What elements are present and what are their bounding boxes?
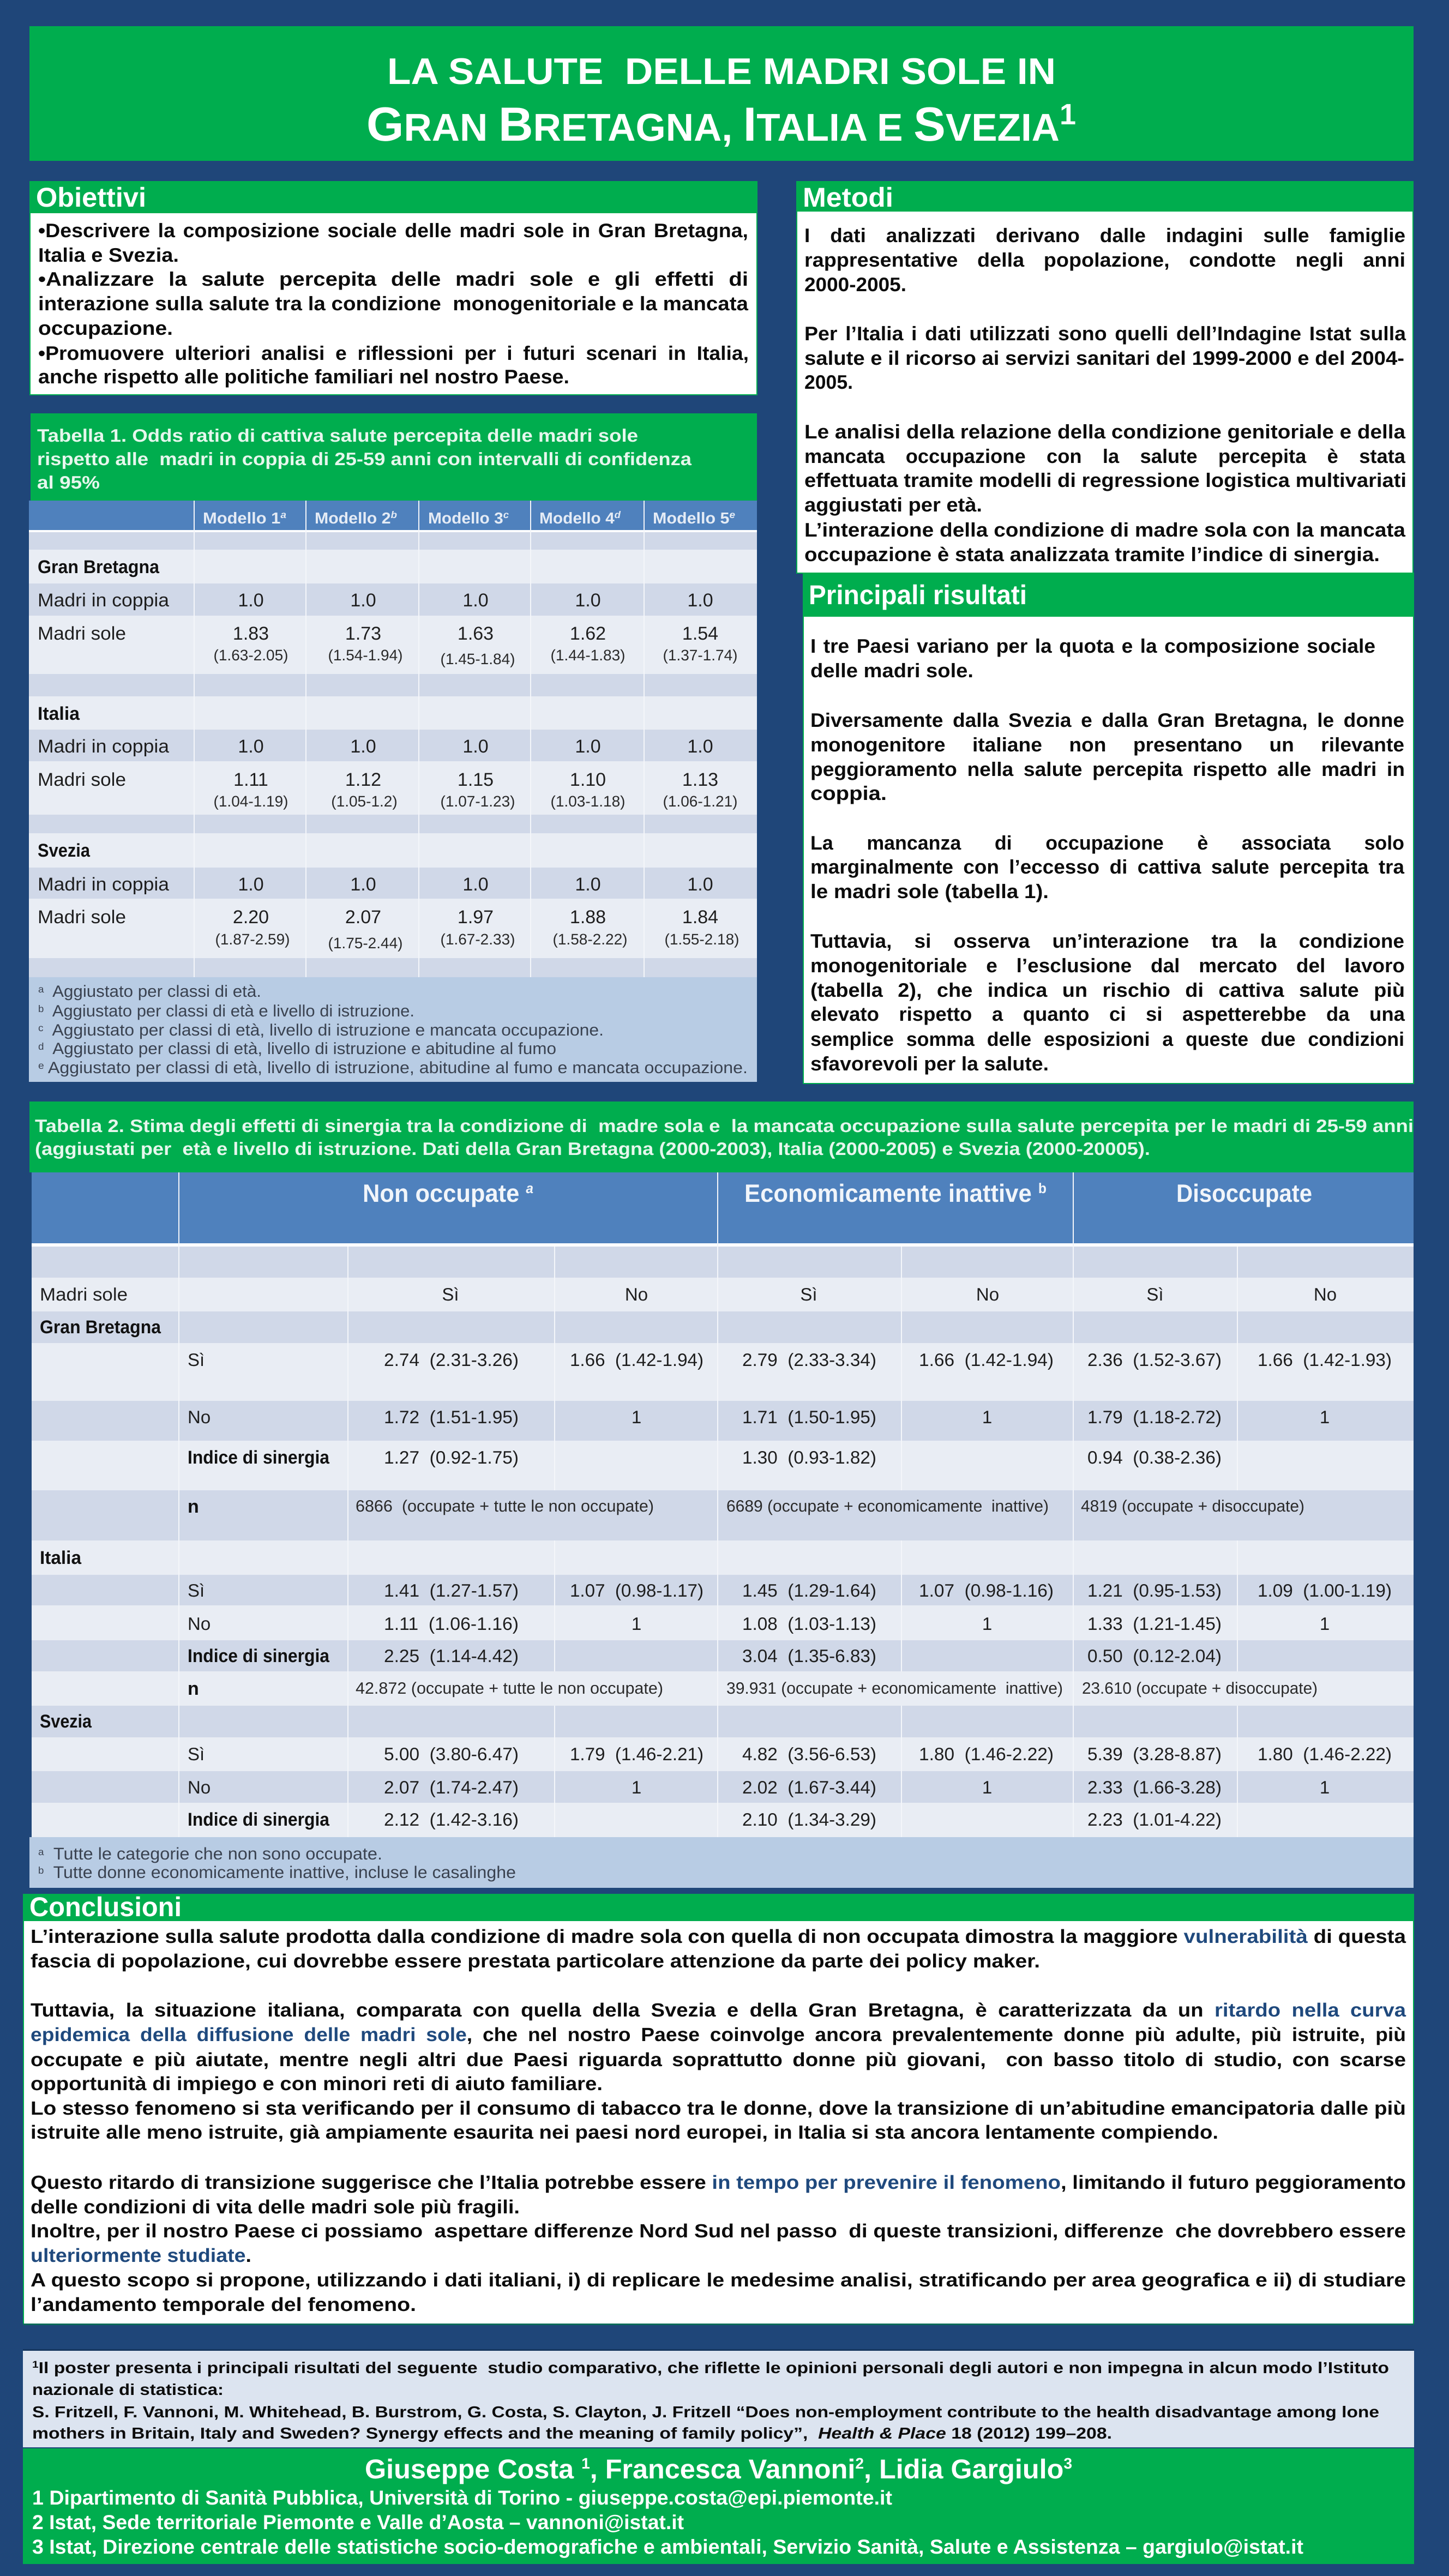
table 2 rows: Italia: Italia	[40, 1548, 82, 1568]
table 1 rows: Italia: 1.0	[350, 736, 376, 757]
table 2 rows: Italia: n	[188, 1678, 199, 1699]
heading: obiettivi: Obiettivi	[36, 182, 146, 213]
table 1 rows: Gran Bretagna: Madri sole	[38, 623, 126, 644]
table 1 rows: Gran Bretagna: (1.45-1.84)	[441, 651, 515, 667]
text: obiettivi: Italia e Svezia.	[38, 244, 179, 266]
text: metodi: occupazione è stata analizzata tramite l’indice di sinergia.	[804, 543, 1380, 565]
table 2 row: madri sole: No	[976, 1284, 999, 1304]
table 1 rows: Svezia: Svezia	[38, 840, 91, 861]
table 1 rows: Svezia: 1.0	[462, 874, 489, 895]
heading: conclusioni: Conclusioni	[29, 1892, 182, 1922]
text: obiettivi: anche rispetto alle politiche familiari nel nostro Paese.	[38, 365, 569, 388]
table 1 rows: Svezia	[38, 840, 739, 952]
table 1 rows: Gran Bretagna: 1.54	[682, 623, 718, 644]
table 1 rows: Italia: 1.10	[570, 769, 606, 790]
table 1 rows: Italia: Madri sole	[38, 769, 126, 790]
table 2 rows: Gran Bretagna: 1.66 (1.42-1.94)	[919, 1350, 1054, 1370]
table 1 rows: Svezia: (1.55-2.18)	[665, 931, 739, 948]
table 1 footnotes: Aggiustato per classi di età.	[44, 983, 261, 1001]
table 1 rows: Italia: (1.07-1.23)	[441, 793, 515, 810]
table 1 rows: Italia: 1.15	[458, 769, 494, 790]
table 2 rows: Italia: 1.07 (0.98-1.17)	[570, 1580, 704, 1600]
table 2 rows: Gran Bretagna: 1.27 (0.92-1.75)	[384, 1447, 519, 1467]
table 1 footnotes: e	[38, 1060, 44, 1071]
text: principali risultati: (tabella 2), che indica un rischio di cattiva salute più	[810, 979, 1405, 1001]
table 2 rows: Svezia: 5.00 (3.80-6.47)	[384, 1744, 519, 1764]
table 2 column headers	[363, 1179, 1312, 1207]
table 1 rows: Svezia: 1.0	[238, 874, 264, 895]
text: conclusioni: fascia di popolazione, cui dovrebbe essere prestata particolare attenzione da parte dei policy maker.	[31, 1951, 1040, 1972]
table 1 column headers: b	[391, 509, 397, 520]
reference note: 1	[32, 2359, 39, 2370]
text: obiettivi: •Promuovere ulteriori analisi e riflessioni per i futuri scenari in Italia,	[38, 342, 749, 364]
table 2 rows: Gran Bretagna: Sì	[188, 1350, 205, 1370]
table 2 rows: Italia	[40, 1548, 1392, 1699]
table 2 rows: Svezia: No	[188, 1777, 211, 1797]
table 1 rows: Italia: Madri in coppia	[38, 736, 169, 757]
table 1 column headers: a	[280, 509, 286, 520]
table 2 rows: Italia: 1.09 (1.00-1.19)	[1258, 1580, 1392, 1600]
table 1 rows: Svezia: Madri in coppia	[38, 874, 169, 895]
text: principali risultati: marginalmente con l’eccesso di cattiva salute percepita tra	[810, 856, 1405, 878]
text: conclusioni: Lo stesso fenomeno si sta verificando per il consumo di tabacco tra le donne, dove la transizione di un’abitudine emancipatoria dalle più	[31, 2098, 1406, 2119]
affiliations: 3 Istat, Direzione centrale delle statistiche socio-demografiche e ambientali, Servizio Sanità, Salute e Assistenza – gargiulo@istat.it	[32, 2536, 1303, 2558]
table 1 rows: Svezia: 1.0	[575, 874, 601, 895]
table 2 rows: Italia: 1.21 (0.95-1.53)	[1087, 1580, 1222, 1600]
title line 2: GRAN BRETAGNA, ITALIA E SVEZIA	[366, 97, 1060, 151]
table 1 footnotes	[29, 977, 757, 1082]
text: principali risultati: le madri sole (tabella 1).	[810, 880, 1049, 902]
text: metodi: effettuata tramite modelli di regressione logistica multivariati	[804, 469, 1406, 491]
text: metodi: 2000-2005.	[804, 273, 906, 296]
table 1 rows: Svezia: 1.0	[350, 874, 376, 895]
table 1 rows: Italia: 1.0	[238, 736, 264, 757]
text: conclusioni: istruite alle meno istruite, già ampiamente esaurita nei paesi nord europei, in Italia si sta ancora lentamente compiendo.	[31, 2122, 1218, 2143]
heading: tabella 2: Tabella 2. Stima degli effetti di sinergia tra la condizione di madre sola e la mancata occupazione sulla salute percepita per le madri di 25-59 anni	[35, 1116, 1414, 1136]
table 2 rows: Gran Bretagna: 1.79 (1.18-2.72)	[1087, 1407, 1222, 1427]
table 2 rows: Gran Bretagna: 1	[632, 1407, 641, 1427]
table 2 rows: Svezia: 2.23 (1.01-4.22)	[1087, 1809, 1222, 1829]
authors: , Francesca Vannoni	[590, 2454, 855, 2484]
table 2 footnotes: a	[38, 1846, 45, 1857]
table 1 rows: Italia: 1.0	[462, 736, 489, 757]
panel: obiettivi	[29, 181, 757, 395]
table 2 rows: Gran Bretagna: Indice di sinergia	[188, 1447, 330, 1468]
text: conclusioni: A questo scopo si propone, utilizzando i dati italiani, i) di replicare le medesime analisi, stratificando per area geografica e ii) di studiare	[31, 2270, 1406, 2291]
table 2 rows: Italia: No	[188, 1614, 211, 1634]
table 2 rows: Gran Bretagna: 1.71 (1.50-1.95)	[742, 1407, 876, 1427]
table 1 footnotes: c	[38, 1022, 44, 1033]
table 1 rows: Svezia: 1.97	[458, 907, 494, 928]
table 1 column headers: c	[503, 509, 509, 520]
table 1 rows: Italia	[38, 703, 737, 810]
heading: tabella 1	[31, 413, 757, 501]
table 2 column headers: Non occupate	[363, 1179, 528, 1207]
table 1 rows: Italia: 1.0	[687, 736, 713, 757]
reference note: mothers in Britain, Italy and Sweden? Synergy effects and the meaning of family policy”, Health & Place 18 (2012) 199–208.	[32, 2425, 1112, 2442]
text: principali risultati: peggioramento nella salute percepita rispetto alle madri in	[810, 758, 1405, 780]
table 2 footnotes: b	[38, 1865, 44, 1876]
table 2 column headers: b	[1038, 1180, 1047, 1196]
text: metodi: Le analisi della relazione della condizione genitoriale e della	[804, 420, 1406, 443]
text: conclusioni: epidemica della diffusione delle madri sole , che nel nostro Paese coinvolge ancora prevalentemente donne più adulte, più istruite, più	[31, 2024, 1406, 2045]
table 2 rows: Gran Bretagna: 2.36 (1.52-3.67)	[1087, 1350, 1222, 1370]
table 1 rows: Gran Bretagna: (1.37-1.74)	[663, 647, 737, 664]
table 2 column headers: Disoccupate	[1176, 1179, 1312, 1207]
table 2 rows: Svezia: 1	[632, 1777, 641, 1797]
title banner	[29, 26, 1414, 161]
text: principali risultati: Tuttavia, si osserva un’interazione tra la condizione	[810, 930, 1404, 952]
heading: tabella 2	[29, 1102, 1414, 1172]
table 2 rows: Svezia: 2.12 (1.42-3.16)	[384, 1809, 519, 1829]
table 1 rows: Gran Bretagna: 1.63	[458, 623, 494, 644]
table 2 rows: Gran Bretagna: 1	[982, 1407, 992, 1427]
text: conclusioni	[31, 1926, 1406, 2315]
text: metodi	[804, 224, 1406, 565]
table 1 rows: Gran Bretagna: Madri in coppia	[38, 590, 169, 611]
table 1 footnotes: a	[38, 984, 44, 995]
table 2 rows: Gran Bretagna: 2.79 (2.33-3.34)	[742, 1350, 876, 1370]
text: conclusioni: occupate e più aiutate, mentre negli altri due Paesi riguarda soprattutto donne più giovani, con basso titolo di studio, con scarse	[31, 2049, 1406, 2071]
affiliations	[32, 2487, 1303, 2558]
table 1 rows: Italia: Italia	[38, 703, 80, 724]
text: obiettivi: •Analizzare la salute percepita delle madri sole e gli effetti di	[38, 268, 748, 290]
authors: 3	[1063, 2455, 1072, 2472]
table 1 rows: Svezia: (1.87-2.59)	[215, 931, 290, 948]
text: conclusioni: opportunità di impiego e con minori reti di aiuto familiare.	[31, 2073, 603, 2094]
table 2 rows: Gran Bretagna: 1.66 (1.42-1.94)	[570, 1350, 704, 1370]
text: metodi: rappresentative della popolazione, condotte negli anni	[804, 249, 1405, 271]
table 1 rows: Svezia: (1.75-2.44)	[328, 935, 402, 952]
table 1 rows: Italia: 1.0	[575, 736, 601, 757]
table 2 footnotes: Tutte donne economicamente inattive, incluse le casalinghe	[44, 1863, 516, 1882]
table 2 rows: Italia: 1.33 (1.21-1.45)	[1087, 1614, 1222, 1634]
table 2 rows: Italia: Sì	[188, 1580, 205, 1600]
panel: tabella 2	[29, 1102, 1414, 1888]
text: conclusioni: L’interazione sulla salute prodotta dalla condizione di madre sola con quella di non occupata dimostra la maggiore vulnerabilità di questa	[31, 1926, 1406, 1947]
table 2 rows: Italia: 1	[632, 1614, 641, 1634]
text: conclusioni: Tuttavia, la situazione italiana, comparata con quella della Svezia e della Gran Bretagna, è caratterizzata da un ritardo nella curva	[31, 2000, 1406, 2021]
table 2 rows: Svezia: 4.82 (3.56-6.53)	[742, 1744, 876, 1764]
table 2 rows: Svezia: 1	[1320, 1777, 1330, 1797]
heading: tabella 1: Tabella 1. Odds ratio di cattiva salute percepita delle madri sole	[37, 425, 638, 446]
table 2 rows: Svezia: Svezia	[40, 1711, 92, 1732]
authors: Giuseppe Costa	[365, 2454, 573, 2484]
table 1 column headers	[203, 509, 735, 527]
table 2 rows: Italia: 1.45 (1.29-1.64)	[742, 1580, 876, 1600]
text: principali risultati: sfavorevoli per la salute.	[810, 1052, 1049, 1075]
table 1 column headers: d	[615, 509, 621, 520]
table 2 rows: Svezia: 1.80 (1.46-2.22)	[1258, 1744, 1392, 1764]
table 2 rows: Italia: 39.931 (occupate + economicamente inattive)	[726, 1680, 1063, 1698]
text: metodi: aggiustati per età.	[804, 493, 982, 516]
table 1 column headers: Modello 3	[428, 510, 501, 527]
heading: metodi: Metodi	[803, 182, 893, 213]
heading: tabella 1: al 95%	[37, 472, 100, 492]
table 1 footnotes: d	[38, 1041, 44, 1052]
table 1 rows: Italia: (1.04-1.19)	[214, 793, 288, 810]
panel: principali risultati	[803, 573, 1414, 1084]
table 1 rows: Svezia: 2.07	[345, 907, 381, 928]
table 2 rows: Gran Bretagna: No	[188, 1407, 211, 1427]
table 2 rows: Italia: 1.11 (1.06-1.16)	[384, 1614, 519, 1634]
table 1 footnotes: Aggiustato per classi di età, livello di istruzione e abitudine al fumo	[44, 1040, 556, 1058]
affiliations: 1 Dipartimento di Sanità Pubblica, Università di Torino - giuseppe.costa@epi.piemonte.it	[32, 2487, 892, 2509]
table 2 rows: Gran Bretagna: 1.30 (0.93-1.82)	[742, 1447, 876, 1467]
table 1 rows: Svezia: 1.88	[570, 907, 606, 928]
table 1 rows: Italia: 1.11	[233, 769, 268, 790]
table 1 rows: Svezia: 1.84	[682, 907, 718, 928]
table 2 rows: Italia: 1.07 (0.98-1.16)	[919, 1580, 1054, 1600]
table 1 rows: Gran Bretagna: 1.0	[462, 590, 489, 611]
table 2 rows: Gran Bretagna: 1.66 (1.42-1.93)	[1258, 1350, 1392, 1370]
table 1 footnotes: Aggiustato per classi di età e livello di istruzione.	[44, 1002, 414, 1020]
table 1 rows: Gran Bretagna: 1.73	[345, 623, 381, 644]
heading: tabella 1: rispetto alle madri in coppia di 25-59 anni con intervalli di confidenza	[37, 449, 692, 469]
table 2	[32, 1172, 1414, 1837]
table 2 rows: Gran Bretagna: n	[188, 1496, 199, 1517]
text: metodi: L’interazione della condizione di madre sola con la mancata	[804, 519, 1406, 541]
table 1 rows: Svezia: Madri sole	[38, 907, 126, 928]
table 1 rows: Gran Bretagna	[38, 557, 737, 667]
text: principali risultati: semplice somma delle esposizioni a queste due condizioni	[810, 1028, 1404, 1050]
table 2 rows: Svezia	[40, 1711, 1392, 1830]
title line 2: 1	[1060, 98, 1076, 131]
authors and affiliations	[23, 2448, 1414, 2564]
affiliations: 2 Istat, Sede territoriale Piemonte e Valle d’Aosta – vannoni@istat.it	[32, 2511, 684, 2533]
text: principali risultati: elevato rispetto a quanto ci si aspetterebbe da una	[810, 1003, 1405, 1025]
table 1 rows: Gran Bretagna: 1.62	[570, 623, 606, 644]
table 1	[29, 501, 757, 977]
table 2 rows: Gran Bretagna: 0.94 (0.38-2.36)	[1087, 1447, 1222, 1467]
table 2 row: madri sole	[40, 1284, 1337, 1304]
table 2 rows: Gran Bretagna: 6689 (occupate + economicamente inattive)	[726, 1497, 1049, 1515]
text: metodi: 2005.	[804, 371, 853, 393]
text: principali risultati: coppia.	[810, 782, 887, 804]
table 1 rows: Gran Bretagna: 1.0	[350, 590, 376, 611]
table 2 rows: Italia: 42.872 (occupate + tutte le non occupate)	[356, 1680, 663, 1698]
table 1 footnotes: Aggiustato per classi di età, livello di istruzione e mancata occupazione.	[44, 1021, 604, 1039]
table 2 rows: Italia: 2.25 (1.14-4.42)	[384, 1646, 519, 1666]
text: principali risultati: monogenitoriale e l’esclusione dal mercato del lavoro	[810, 954, 1405, 977]
table 2 column headers: a	[526, 1180, 533, 1196]
reference note: S. Fritzell, F. Vannoni, M. Whitehead, B. Burstrom, G. Costa, S. Clayton, J. Fritzell “Does non-employment contribute to the health disadvantage among lone	[32, 2404, 1379, 2421]
reference note: Il poster presenta i principali risultati del seguente studio comparativo, che riflette le opinioni personali degli autori e non impegna in alcun modo l’Istituto	[39, 2360, 1389, 2377]
table 2 row: madri sole: Madri sole	[40, 1284, 128, 1304]
text: obiettivi	[38, 219, 749, 388]
text: principali risultati: delle madri sole.	[810, 659, 973, 682]
table 1 footnotes: b	[38, 1003, 44, 1014]
table 2 row: madri sole: No	[1314, 1284, 1337, 1304]
table 1 rows: Gran Bretagna: 1.0	[687, 590, 713, 611]
table 1 rows: Gran Bretagna: (1.54-1.94)	[328, 647, 402, 664]
table 2 rows: Svezia: 1	[982, 1777, 992, 1797]
table 2 rows: Italia: 0.50 (0.12-2.04)	[1087, 1646, 1222, 1666]
text: principali risultati: monogenitore italiane non presentano un rilevante	[810, 733, 1404, 756]
authors: 2	[855, 2455, 864, 2472]
text: principali risultati: La mancanza di occupazione è associata solo	[810, 832, 1404, 854]
table 2 rows: Italia: 3.04 (1.35-6.83)	[742, 1646, 876, 1666]
table 1 rows: Svezia: 1.0	[687, 874, 713, 895]
text: principali risultati: Diversamente dalla Svezia e dalla Gran Bretagna, le donne	[810, 709, 1404, 731]
table 1 rows: Italia: 1.12	[345, 769, 381, 790]
table 1 rows: Svezia: (1.58-2.22)	[553, 931, 627, 948]
table 2 rows: Svezia: 1.80 (1.46-2.22)	[919, 1744, 1054, 1764]
table 1 rows: Italia: (1.06-1.21)	[663, 793, 737, 810]
table 1 rows: Gran Bretagna: Gran Bretagna	[38, 557, 160, 577]
table 2 rows: Gran Bretagna: 1	[1320, 1407, 1330, 1427]
text: principali risultati: I tre Paesi variano per la quota e la composizione sociale	[810, 635, 1375, 657]
table 2 rows: Svezia: 2.07 (1.74-2.47)	[384, 1777, 519, 1797]
panel: metodi	[796, 181, 1414, 573]
text: metodi: salute e il ricorso ai servizi sanitari del 1999-2000 e del 2004-	[804, 347, 1404, 369]
table 2 rows: Italia: 1	[982, 1614, 992, 1634]
table 2 rows: Svezia: Sì	[188, 1744, 205, 1764]
reference note	[23, 2349, 1414, 2447]
table 2 rows: Svezia: Indice di sinergia	[188, 1809, 330, 1830]
table 2 rows: Svezia: 2.33 (1.66-3.28)	[1087, 1777, 1222, 1797]
heading: tabella 2: (aggiustati per età e livello di istruzione. Dati della Gran Bretagna (2000-2003), Italia (2000-2005) e Svezia (2000-20005).	[35, 1139, 1150, 1159]
table 1 column headers: Modello 2	[315, 510, 388, 527]
table 2 rows: Gran Bretagna: Gran Bretagna	[40, 1317, 161, 1338]
table 2 rows: Gran Bretagna: 1.72 (1.51-1.95)	[384, 1407, 519, 1427]
text: conclusioni: Questo ritardo di transizione suggerisce che l’Italia potrebbe essere in tempo per prevenire il fenomeno , limitando il futuro peggioramento	[31, 2172, 1406, 2193]
table 1 rows: Italia: (1.03-1.18)	[551, 793, 625, 810]
table 1 rows: Gran Bretagna: 1.0	[238, 590, 264, 611]
table 1 rows: Gran Bretagna: (1.44-1.83)	[551, 647, 625, 664]
table 1 rows: Svezia: (1.67-2.33)	[441, 931, 515, 948]
text: principali risultati	[810, 635, 1405, 1075]
authors: 1	[581, 2455, 590, 2472]
text: obiettivi: occupazione.	[38, 317, 173, 339]
reference note: nazionale di statistica:	[32, 2381, 224, 2399]
table 1 rows: Gran Bretagna: 1.83	[233, 623, 269, 644]
table 2 footnotes	[29, 1837, 1414, 1888]
title line 1: LA SALUTE DELLE MADRI SOLE IN	[387, 51, 1056, 92]
table 2 footnotes: Tutte le categorie che non sono occupate.	[44, 1844, 382, 1863]
table 2 rows: Svezia: 2.10 (1.34-3.29)	[742, 1809, 876, 1829]
table 2 rows: Gran Bretagna	[40, 1317, 1392, 1517]
table 2 rows: Svezia: 2.02 (1.67-3.44)	[742, 1777, 876, 1797]
table 2 row: madri sole: Sì	[442, 1284, 459, 1304]
text: obiettivi: •Descrivere la composizione sociale delle madri sole in Gran Bretagna,	[38, 219, 748, 242]
table 1 footnotes: Aggiustato per classi di età, livello di istruzione, abitudine al fumo e mancata occupazione.	[44, 1059, 748, 1077]
table 2 row: madri sole: Sì	[1146, 1284, 1164, 1304]
table 2 rows: Italia: 1.08 (1.03-1.13)	[742, 1614, 876, 1634]
authors: , Lidia Gargiulo	[864, 2454, 1063, 2484]
table 2 rows: Gran Bretagna: 2.74 (2.31-3.26)	[384, 1350, 519, 1370]
table 2 rows: Gran Bretagna: 4819 (occupate + disoccupate)	[1081, 1497, 1304, 1515]
text: conclusioni: ulteriormente studiate .	[31, 2245, 251, 2266]
table 2 column headers: Economicamente inattive	[744, 1179, 1047, 1207]
table 1 column headers: Modello 4	[539, 510, 612, 527]
text: metodi: Per l’Italia i dati utilizzati sono quelli dell’Indagine Istat sulla	[804, 322, 1406, 345]
table 2 rows: Italia: 23.610 (occupate + disoccupate)	[1082, 1680, 1318, 1698]
table 2 rows: Italia: 1.41 (1.27-1.57)	[384, 1580, 519, 1600]
table 1 rows: Italia: 1.13	[682, 769, 718, 790]
table 2 rows: Italia: Indice di sinergia	[188, 1646, 330, 1666]
text: conclusioni: l’andamento temporale del fenomeno.	[31, 2294, 416, 2315]
table 1 rows: Svezia: 2.20	[233, 907, 269, 928]
panel: conclusioni	[23, 1892, 1414, 2325]
table 1 column headers: Modello 5	[653, 510, 726, 527]
table 2 rows: Svezia: 1.79 (1.46-2.21)	[570, 1744, 704, 1764]
table 2 row: madri sole: No	[625, 1284, 648, 1304]
table 1 column headers: e	[729, 509, 735, 520]
table 2 rows: Svezia: 5.39 (3.28-8.87)	[1087, 1744, 1222, 1764]
table 2 rows: Gran Bretagna: 6866 (occupate + tutte le non occupate)	[356, 1497, 654, 1515]
table 1 column headers: Modello 1	[203, 510, 276, 527]
table 2 row: madri sole: Sì	[800, 1284, 817, 1304]
panel: tabella 1	[29, 413, 757, 1082]
text: obiettivi: interazione sulla salute tra la condizione monogenitoriale e la mancata	[38, 292, 749, 315]
table 1 rows: Italia: (1.05-1.2)	[331, 793, 398, 810]
text: conclusioni: delle condizioni di vita delle madri sole più fragili.	[31, 2196, 520, 2218]
heading: principali risultati: Principali risultati	[809, 580, 1027, 610]
text: metodi: mancata occupazione con la salute percepita è stata	[804, 445, 1406, 467]
table 1 rows: Gran Bretagna: 1.0	[575, 590, 601, 611]
text: metodi: I dati analizzati derivano dalle indagini sulle famiglie	[804, 224, 1405, 246]
text: conclusioni: Inoltre, per il nostro Paese ci possiamo aspettare differenze Nord Sud nel passo di queste transizioni, differenze che dovrebbero essere	[31, 2220, 1406, 2242]
table 1 rows: Gran Bretagna: (1.63-2.05)	[214, 647, 288, 664]
table 2 rows: Italia: 1	[1320, 1614, 1330, 1634]
